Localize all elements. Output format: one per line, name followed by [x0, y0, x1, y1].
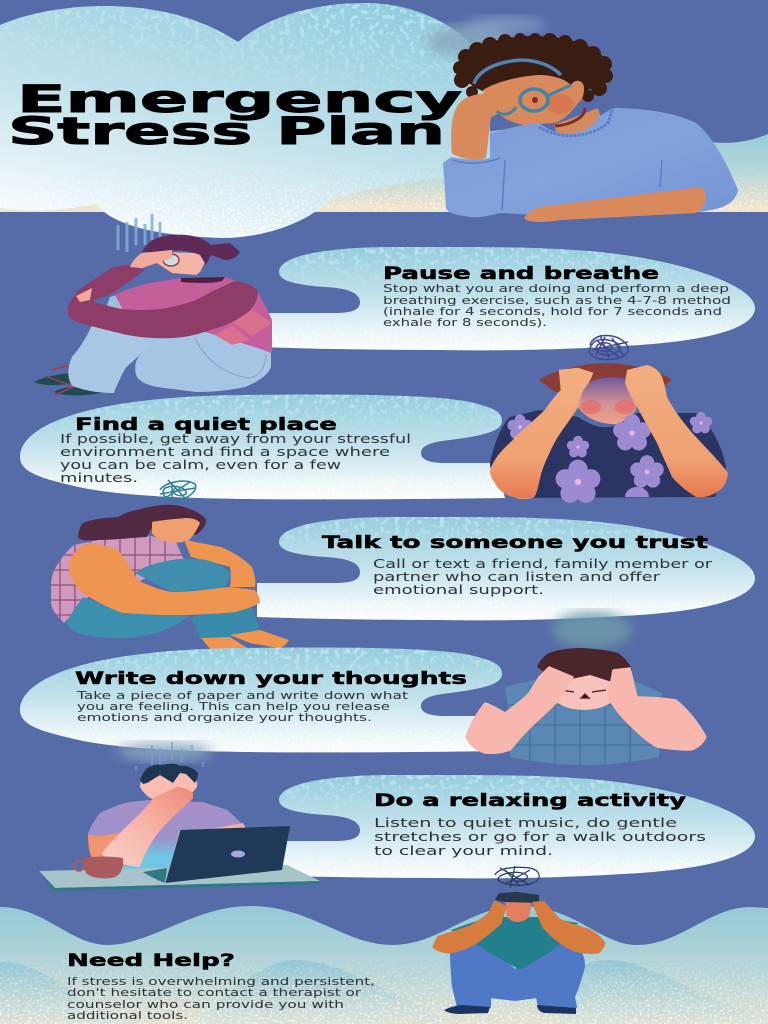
icon: man at laptop [39, 742, 320, 891]
text: need help: If stress is overwhelming and persistent, [67, 975, 375, 988]
text: find a quiet place [60, 432, 411, 485]
heading: relaxing activity: Do a relaxing activity [374, 791, 686, 810]
text: pause and breathe: breathing exercise, such as the 4-7-8 method [383, 294, 731, 307]
icon: man pressing temples [466, 612, 706, 765]
text: find a quiet place: minutes. [60, 471, 138, 485]
icon: woman with glasses rubbing eye [426, 16, 738, 222]
text: relaxing activity: to clear your mind. [374, 843, 553, 858]
text: talk to someone: emotional support. [373, 583, 544, 597]
heading: talk to someone: Talk to someone you trust [322, 533, 708, 552]
text: write down: Take a piece of paper and write down what [76, 689, 409, 702]
heading: title: Emergency [17, 78, 462, 121]
heading: find a quiet place: Find a quiet place [75, 415, 337, 434]
heading: pause and breathe: Pause and breathe [383, 264, 659, 283]
panel: write down bubble [15, 645, 510, 755]
text: need help: don't hesitate to contact a therapist or [67, 986, 362, 999]
icon: person holding head in floral shirt [490, 335, 728, 503]
panel: relaxing activity bubble [279, 775, 755, 878]
text: find a quiet place: you can be calm, even for a few [60, 458, 341, 472]
panel: need help wave [0, 900, 768, 1024]
icon: sitting woman in pink sweater [34, 214, 272, 395]
panel: pause and breathe bubble [268, 247, 755, 350]
text: pause and breathe: exhale for 8 seconds). [383, 316, 547, 329]
text: find a quiet place: environment and find a space where [60, 445, 390, 459]
text: pause and breathe: (inhale for 4 seconds, hold for 7 seconds and [383, 305, 722, 318]
text: write down: you are feeling. This can help you release [77, 700, 390, 713]
text: pause and breathe [383, 282, 731, 329]
text: relaxing activity [374, 815, 706, 858]
icon: crouching man [434, 866, 604, 1014]
panel: header cloud [0, 0, 768, 240]
text: pause and breathe: Stop what you are doing and perform a deep [383, 282, 729, 295]
text: need help: additional tools. [67, 1009, 188, 1022]
text: relaxing activity: Listen to quiet music, do gentle [374, 815, 677, 830]
panel: find a quiet place bubble [15, 392, 510, 502]
heading: need help: Need Help? [67, 951, 235, 970]
text: talk to someone: Call or text a friend, family member or [373, 557, 712, 571]
panel: talk to someone bubble [250, 515, 760, 625]
text: talk to someone: partner who can listen and offer [373, 570, 660, 584]
icon: woman hugging knees [50, 480, 289, 662]
heading: title: Stress Plan [8, 110, 445, 153]
heading: title [8, 78, 462, 153]
text: relaxing activity: stretches or go for a walk outdoors [374, 829, 706, 844]
text: write down: emotions and organize your thoughts. [77, 711, 372, 724]
heading: write down: Write down your thoughts [75, 669, 467, 688]
text: talk to someone [373, 557, 712, 597]
text: need help [67, 975, 375, 1022]
text: find a quiet place: If possible, get away from your stressful [60, 432, 411, 446]
text: need help: counselor who can provide you with [67, 998, 344, 1011]
text: write down [76, 689, 409, 724]
